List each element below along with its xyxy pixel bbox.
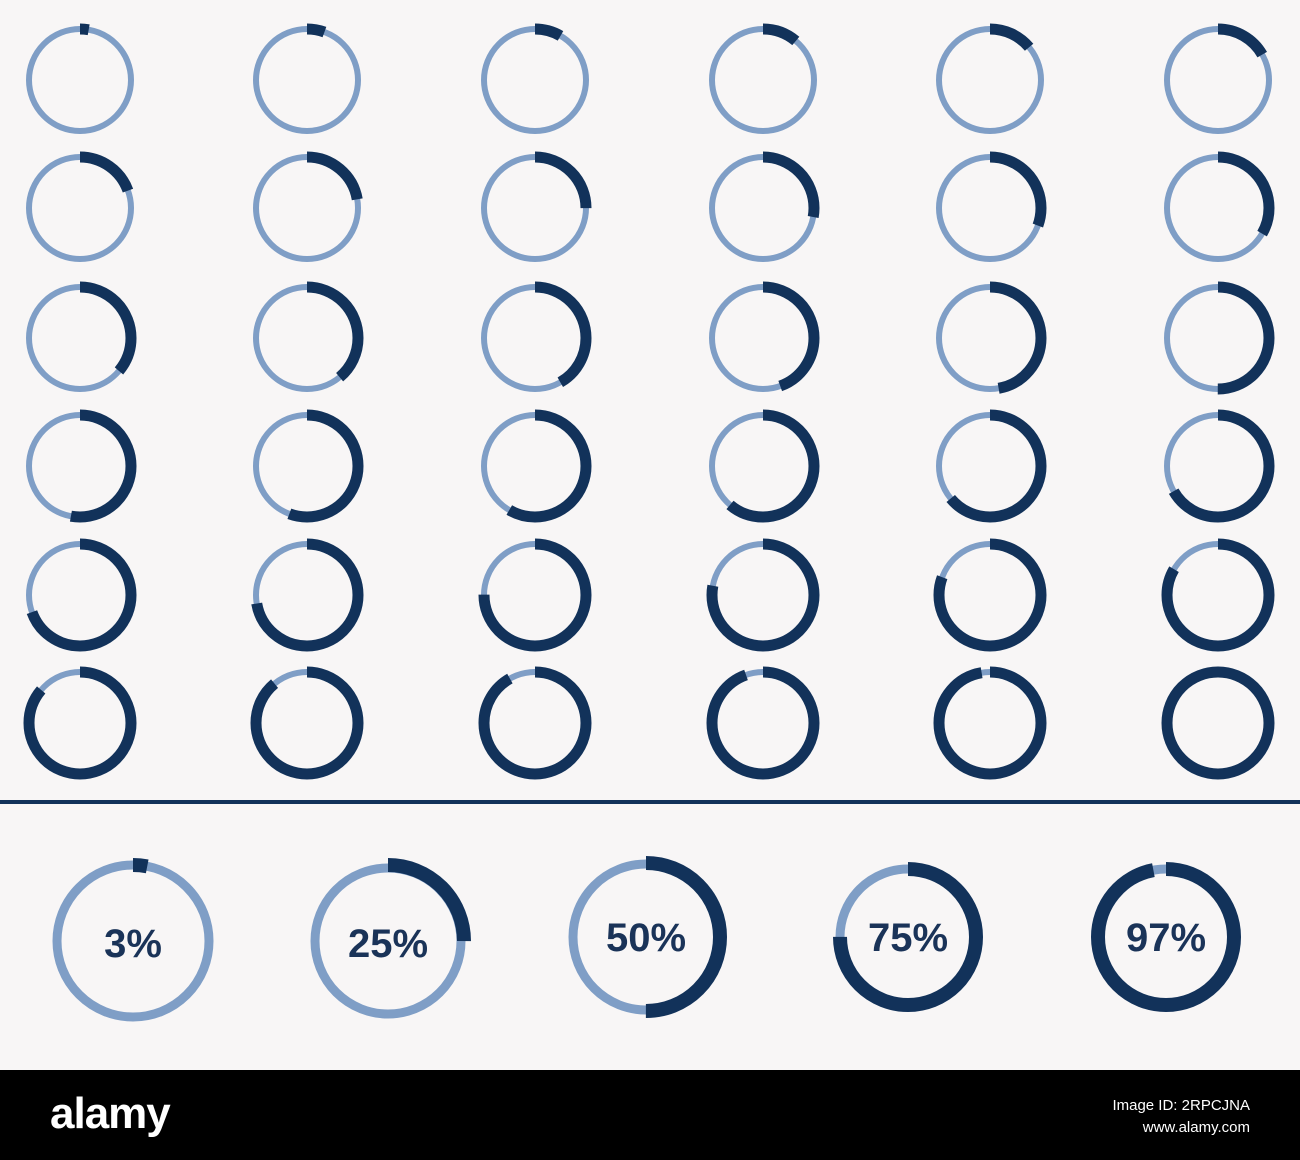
- ring row 5: [29, 544, 1269, 646]
- ring row 4: [29, 415, 1269, 517]
- footer image id: Image ID: 2RPCJNA: [1112, 1097, 1250, 1114]
- ring 25%: 25%: [348, 922, 428, 966]
- labelled percentage rings: [57, 863, 1234, 1017]
- ring 3%: 3%: [104, 922, 162, 966]
- ring row 2: [29, 157, 1269, 259]
- ring 3%: [57, 865, 209, 1017]
- footer url: www.alamy.com: [1142, 1119, 1250, 1136]
- ring 50%: 50%: [606, 916, 686, 960]
- ring row 3: [29, 287, 1269, 389]
- footer logo: alamy: [50, 1089, 171, 1138]
- footer bar: [0, 1070, 1300, 1160]
- grid of progress rings: [29, 29, 1269, 774]
- ring 25%: [312, 865, 464, 1017]
- ring 97%: [1098, 869, 1234, 1005]
- ring 75%: [840, 869, 976, 1005]
- ring row 6: [29, 672, 1269, 774]
- ring row 1: [29, 29, 1269, 131]
- ring 50%: [572, 863, 720, 1011]
- ring 75%: 75%: [868, 916, 948, 960]
- ring 97%: 97%: [1126, 916, 1206, 960]
